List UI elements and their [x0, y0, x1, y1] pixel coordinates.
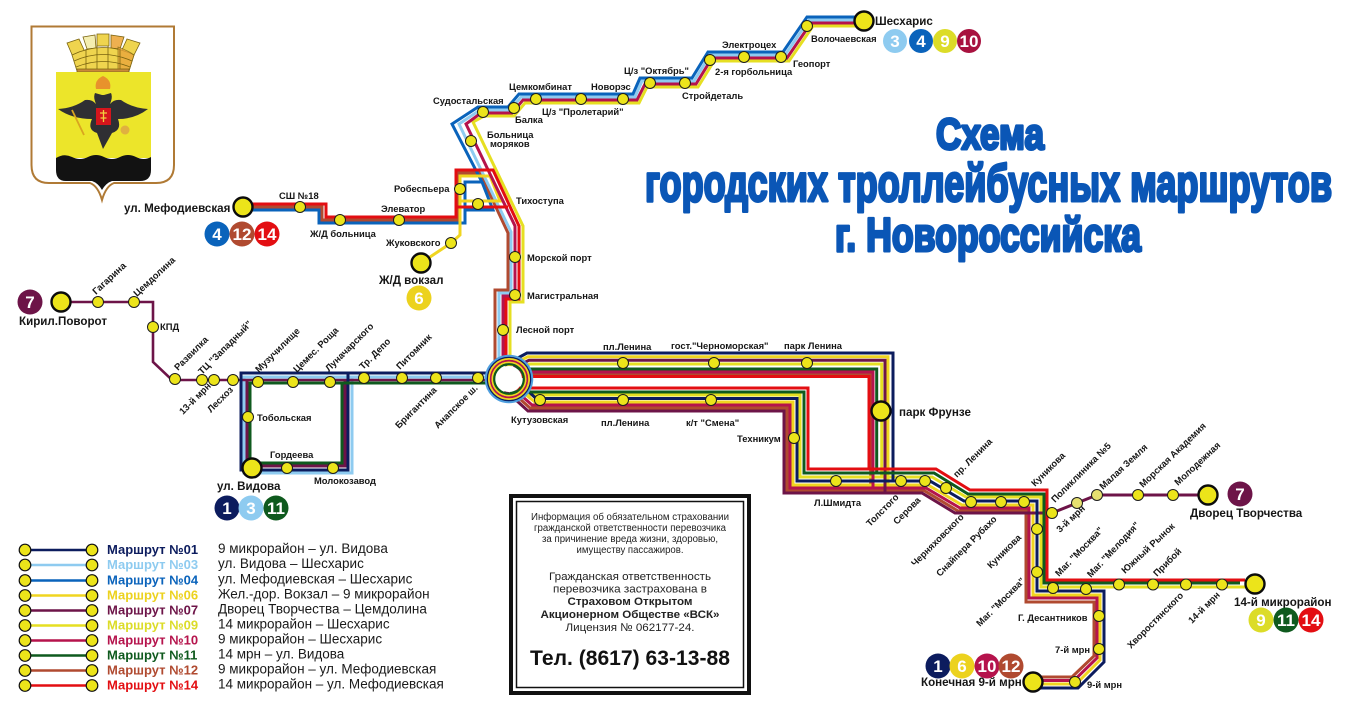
route badge: Кирил.Поворот — [18, 290, 42, 314]
station labels: Г. Десантников — [1018, 612, 1088, 623]
station labels: Л.Шмидта — [814, 497, 862, 508]
legend row 07: Маршрут №07 — [107, 602, 198, 618]
station labels: Стройдеталь — [682, 90, 743, 101]
legend row 12 — [19, 662, 436, 678]
insurance notice text: Гражданская ответственность — [549, 571, 711, 583]
station labels: Геопорт — [793, 58, 831, 69]
station labels: Поликлиника №5 — [1049, 440, 1113, 504]
legend row 14 — [19, 676, 444, 692]
station labels: парк Ленина — [784, 340, 843, 351]
coat of arms of Novorossiysk — [32, 26, 174, 200]
insurance notice text: имуществу пассажиров. — [576, 545, 684, 556]
legend row 10 — [19, 632, 382, 648]
station labels: Тобольская — [257, 412, 311, 423]
station labels: Малая Земля — [1097, 441, 1150, 491]
route badges: Конечная 9-й мрн: 6 — [957, 657, 967, 676]
station labels: 13-й мрн — [177, 380, 213, 416]
route badges: ул. Видова: 3 — [246, 499, 256, 518]
legend row 04: Маршрут №04 — [107, 572, 199, 588]
station labels: пр. Ленина — [951, 435, 995, 479]
double headed eagle — [58, 93, 148, 149]
title line 3: г. Новороссийска — [835, 208, 1142, 261]
station labels: Морской порт — [527, 252, 592, 263]
station labels: Гордеева — [270, 449, 314, 460]
terminal names: Ж/Д вокзал — [378, 274, 443, 287]
shield outline — [32, 26, 174, 200]
station labels: Цемдолина — [131, 254, 178, 298]
terminal names: парк Фрунзе — [899, 406, 971, 419]
station labels: Прибой — [1151, 545, 1184, 578]
imperial orb crown — [96, 76, 110, 89]
insurance notice text: гражданской ответственности перевозчика — [534, 523, 727, 534]
orb — [120, 126, 130, 134]
route badges: Шесхарис: 3 — [890, 32, 900, 51]
route badges: 14-й микрорайон: 14 — [1302, 611, 1321, 630]
route badges: ул. Мефодиевская: 14 — [258, 225, 277, 244]
station labels: 14-й мрн — [1186, 589, 1222, 625]
route badges: Конечная 9-й мрн: 10 — [978, 657, 996, 676]
station labels: КПД — [160, 321, 179, 332]
station labels: Молокозавод — [314, 475, 376, 486]
legend row 06: Жел.-дор. Вокзал – 9 микрорайон — [218, 586, 430, 602]
insurance notice text: Информация об обязательном страховании — [531, 512, 729, 523]
station labels: моряков — [490, 138, 530, 149]
legend row 07 — [19, 602, 427, 618]
legend row 03: ул. Видова – Шесхарис — [218, 556, 364, 571]
terminal names: ул. Видова — [217, 480, 281, 493]
insurance notice text: Лицензия № 062177-24. — [566, 622, 694, 634]
route badge: Ж/Д вокзал: 6 — [414, 289, 424, 308]
phone number: Тел. (8617) 63-13-88 — [530, 647, 730, 670]
legend row 12: 9 микрорайон – ул. Мефодиевская — [218, 662, 436, 676]
insurance notice text: Страховом Открытом — [568, 596, 692, 608]
legend row 10: Маршрут №10 — [107, 632, 198, 648]
station labels: 3-й мрн — [1054, 502, 1087, 534]
route badges: Конечная 9-й мрн: 1 — [933, 657, 943, 676]
route badge: Ж/Д вокзал — [406, 286, 432, 310]
legend row 01: Маршрут №01 — [107, 542, 198, 557]
legend row 01: 9 микрорайон – ул. Видова — [218, 541, 388, 556]
route 07 maroon — [61, 302, 1208, 513]
legend row 11: 14 мрн – ул. Видова — [218, 646, 345, 662]
insurance notice text: Акционерном Обществе «ВСК» — [540, 609, 720, 621]
route badges: Конечная 9-й мрн — [926, 654, 1024, 678]
legend row 03: Маршрут №03 — [107, 557, 198, 572]
legend row 04 — [19, 572, 413, 588]
station labels — [90, 33, 1222, 690]
yellow field — [56, 72, 151, 158]
station labels: Балка — [515, 114, 544, 125]
insurance notice text: за причинение вреда жизни, здоровью, — [542, 534, 718, 545]
station labels: Хворостянского — [1125, 589, 1186, 650]
route badges: Конечная 9-й мрн: 12 — [1002, 657, 1020, 676]
sea wave base — [56, 155, 151, 190]
legend row 01 — [19, 541, 388, 557]
station labels: СШ №18 — [279, 190, 319, 201]
route badges: 14-й микрорайон: 9 — [1256, 611, 1266, 630]
station labels: Луначарского — [323, 320, 376, 373]
route badges: ул. Видова: 1 — [222, 499, 232, 518]
insurance notice text: перевозчика застрахована в — [553, 584, 707, 596]
route badge: Кирил.Поворот: 7 — [25, 293, 35, 312]
legend row 10: 9 микрорайон – Шесхарис — [218, 632, 382, 646]
insurance notice text — [531, 512, 729, 634]
legend row 07: Дворец Творчества – Цемдолина — [218, 602, 427, 616]
station labels: Куникова — [1029, 449, 1068, 488]
terminal names: Шесхарис — [875, 15, 933, 28]
station labels: Морская Академия — [1137, 420, 1208, 489]
station labels: Серова — [891, 494, 923, 526]
station labels: к/т "Смена" — [686, 417, 739, 428]
station labels: Новорэс — [591, 81, 631, 92]
station labels: Анапское ш. — [432, 382, 480, 430]
route badge: Дворец Творчества: 7 — [1235, 485, 1245, 504]
route badges: Шесхарис: 10 — [960, 32, 978, 51]
station labels: Маг. "Москва" — [1053, 524, 1105, 578]
central hub ring — [486, 356, 532, 402]
station labels: Элеватор — [381, 203, 426, 214]
station labels: Волочаевская — [811, 33, 877, 44]
intermediate stations — [92, 20, 1228, 688]
station labels: Толстого — [864, 491, 901, 528]
station labels: Магистральная — [527, 290, 599, 301]
station labels: Кутузовская — [511, 414, 568, 425]
box frame — [511, 496, 749, 693]
terminal names: ул. Мефодиевская — [124, 202, 230, 215]
station labels: Южный Рынок — [1119, 520, 1177, 575]
station labels: Маг. "Москва" — [974, 575, 1027, 628]
route 09 lime yellow — [473, 26, 1245, 587]
red cross shield — [96, 108, 111, 125]
legend row 09 — [19, 616, 390, 632]
station labels: Снайпера Рубахо — [934, 513, 999, 578]
mural crown — [67, 34, 140, 72]
station labels: Лесхоз — [205, 384, 235, 414]
station labels: Черняховского — [909, 511, 966, 568]
legend row 11: Маршрут №11 — [107, 648, 197, 662]
route badges: ул. Мефодиевская: 4 — [212, 225, 222, 244]
legend row 12: Маршрут №12 — [107, 662, 198, 678]
route badges: ул. Мефодиевская — [204, 222, 280, 246]
station labels: Музучилище — [253, 325, 302, 374]
station labels: Робеспьера — [394, 183, 450, 194]
route 11 green — [250, 369, 1240, 583]
station labels: пл.Ленина — [603, 341, 652, 352]
title line 1: Схема — [936, 110, 1044, 159]
legend row 04: ул. Мефодиевская – Шесхарис — [218, 572, 413, 586]
station labels: Судостальская — [433, 95, 504, 106]
route badges: ул. Видова: 11 — [267, 499, 285, 518]
station labels: 7-й мрн — [1055, 644, 1090, 655]
legend row 09: 14 микрорайон – Шесхарис — [218, 616, 390, 632]
station labels: Техникум — [737, 433, 781, 444]
route badges: Шесхарис: 9 — [940, 32, 950, 51]
route 03 light blue — [244, 20, 857, 473]
station labels: пл.Ленина — [601, 417, 650, 428]
station labels: Развилка — [172, 333, 211, 372]
route badges: Шесхарис — [883, 29, 981, 53]
legend row 06 — [19, 586, 430, 602]
route 12 brown — [243, 173, 1094, 677]
legend — [19, 541, 444, 692]
station labels: Цемес. Роща — [291, 324, 341, 374]
route badges: ул. Мефодиевская: 12 — [233, 225, 251, 244]
station labels: Больница — [487, 129, 534, 140]
terminal names: 14-й микрорайон — [1234, 596, 1332, 609]
station labels: Жуковского — [385, 237, 441, 248]
terminal names: Кирил.Поворот — [19, 315, 107, 328]
station labels: Молодежная — [1172, 439, 1222, 487]
legend row 11 — [19, 646, 345, 662]
station labels: Лесной порт — [516, 324, 575, 335]
station labels: Ж/Д больница — [309, 228, 377, 239]
station labels: Маг. "Мелодия" — [1084, 519, 1141, 579]
title — [645, 110, 1332, 261]
station labels: Цемкомбинат — [509, 81, 572, 92]
route badges: Шесхарис: 4 — [916, 32, 926, 51]
route badges: 14-й микрорайон — [1248, 608, 1324, 632]
station labels: 9-й мрн — [1087, 679, 1122, 690]
station labels: Ц/з "Октябрь" — [624, 65, 689, 76]
route 01 navy — [241, 353, 1104, 688]
legend row 09: Маршрут №09 — [107, 618, 198, 632]
terminal names: Конечная 9-й мрн — [921, 676, 1022, 689]
legend row 14: 14 микрорайон – ул. Мефодиевская — [218, 676, 444, 692]
station labels: гост."Черноморская" — [671, 340, 769, 351]
station labels: Ц/з "Пролетарий" — [542, 106, 624, 117]
insurance information box — [511, 496, 749, 693]
station labels: Бригантина — [393, 384, 439, 430]
route 06 yellow — [421, 176, 1100, 684]
route badges: 14-й микрорайон: 11 — [1277, 611, 1295, 630]
sceptre — [72, 110, 84, 135]
terminal names: Дворец Творчества — [1190, 507, 1303, 520]
legend row 03 — [19, 556, 364, 572]
route 10 crimson — [466, 23, 1097, 680]
route 14 red — [243, 170, 1245, 580]
station labels: Тр. Депо — [357, 335, 393, 371]
station labels: Электроцех — [722, 39, 777, 50]
station labels: Куникова — [985, 531, 1024, 570]
route 04 blue — [243, 17, 857, 223]
station labels: Гагарина — [90, 259, 129, 296]
station labels: 2-я горбольница — [715, 66, 793, 77]
station labels: ТЦ "Западный" — [196, 318, 254, 376]
station labels: Питомник — [394, 331, 434, 371]
route badges: ул. Видова — [214, 496, 288, 520]
route badge: Дворец Творчества — [1228, 482, 1252, 506]
station labels: Тихоступа — [516, 195, 565, 206]
legend row 14: Маршрут №14 — [107, 678, 199, 692]
legend row 06: Маршрут №06 — [107, 588, 198, 602]
